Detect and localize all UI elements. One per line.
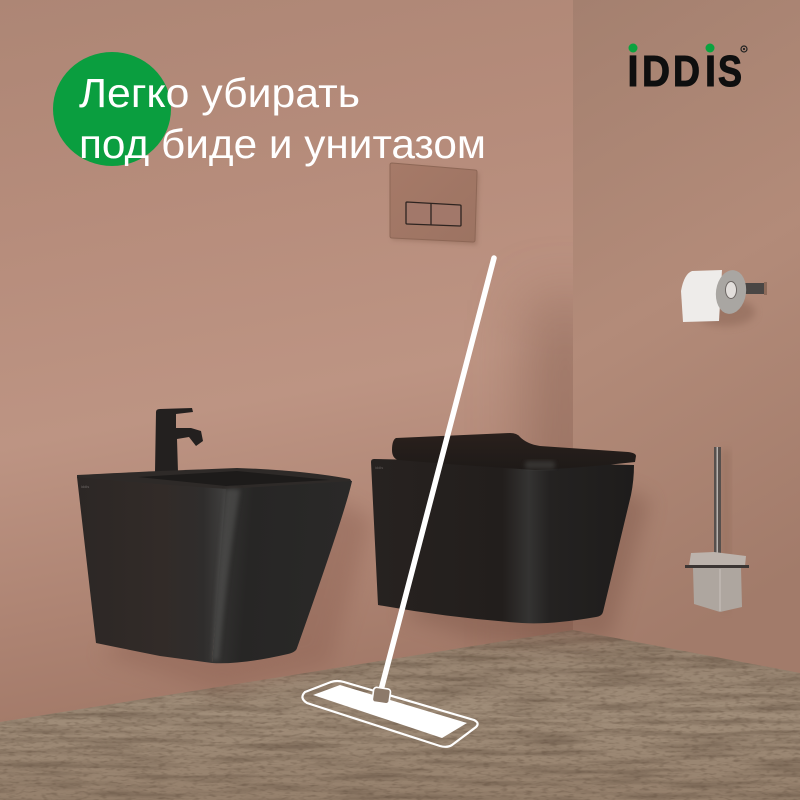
title: под биде и унитазом (79, 121, 486, 167)
logo: IDDIS: D (642, 47, 670, 96)
flush plate (390, 163, 479, 245)
toilet (371, 433, 636, 623)
title: Легко убирать (79, 70, 360, 116)
logo: IDDIS (628, 44, 747, 96)
wall shading near corner (510, 288, 573, 636)
logo: IDDIS: S (718, 47, 742, 96)
bidet brand mark: iddis (81, 484, 89, 489)
bidet basin (138, 471, 330, 486)
title (79, 70, 486, 167)
bidet (77, 408, 352, 663)
mop handle (381, 258, 494, 690)
toilet bowl (371, 459, 634, 623)
background: right wall (573, 0, 800, 680)
bidet shadow (100, 500, 372, 690)
mop (302, 258, 494, 747)
logo: IDDIS: I (628, 47, 638, 96)
logo: IDDIS: D (673, 47, 700, 96)
bidet edge highlight (212, 489, 240, 660)
toilet brand mark: iddis (375, 465, 383, 470)
mop joint (372, 687, 391, 704)
bidet faucet (155, 408, 203, 472)
green circle (53, 52, 171, 166)
toilet seat highlight (525, 461, 555, 469)
toilet shadow (400, 480, 650, 640)
toilet seat (392, 433, 636, 470)
bidet right face (212, 481, 352, 663)
background: left wall (0, 0, 574, 730)
toilet brush holder (685, 447, 749, 612)
background: floor (0, 630, 800, 800)
logo: IDDIS: I (705, 47, 716, 96)
bidet left face (77, 477, 231, 663)
bidet rim (77, 468, 352, 490)
mop pad (313, 685, 467, 738)
mop head outline (302, 681, 478, 747)
toilet paper holder (681, 268, 767, 326)
